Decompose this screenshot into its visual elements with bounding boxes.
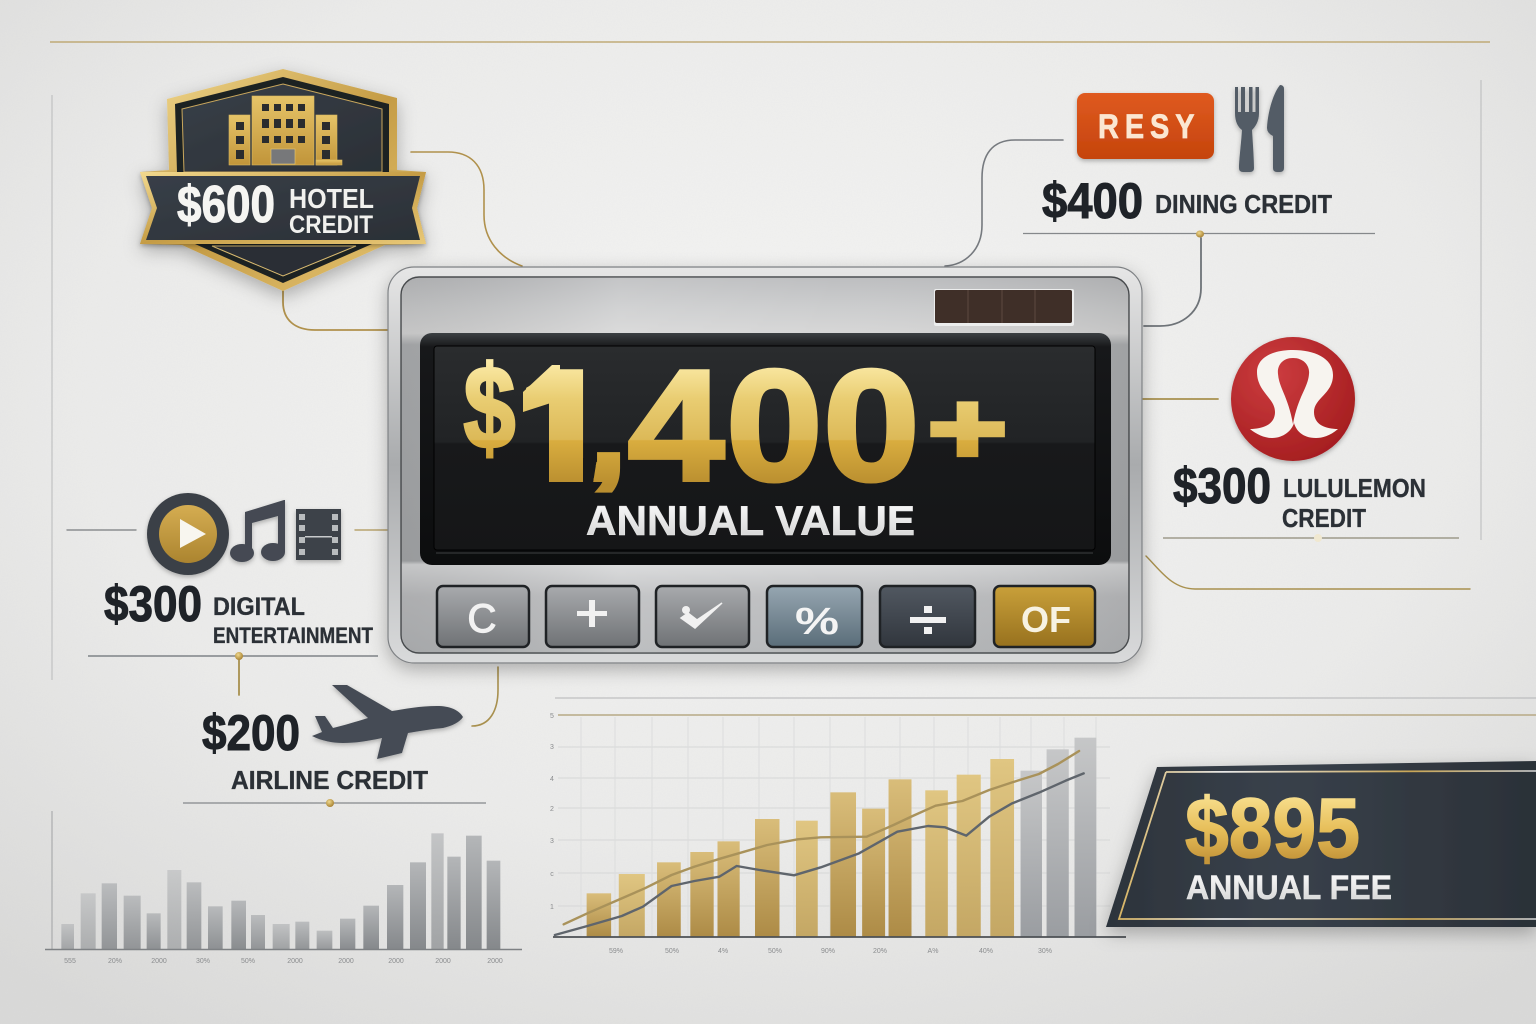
panel: airline credit [183, 685, 486, 807]
entertainment label: DIGITAL [213, 593, 305, 621]
x-axis labels: 2000 [151, 958, 167, 965]
y-axis labels [550, 713, 554, 911]
airline amount: $200 [202, 705, 300, 761]
panel: lululemon credit [1163, 337, 1459, 542]
logo: resy [1077, 93, 1214, 159]
display [420, 333, 1111, 565]
lululemon label [1282, 473, 1426, 533]
x-axis labels: 59% [609, 948, 623, 955]
icon: airplane [312, 685, 463, 759]
x-axis labels: 90% [821, 948, 835, 955]
x-axis labels: 50% [665, 948, 679, 955]
x-axis labels: A% [928, 948, 938, 955]
icon: film strip [296, 509, 341, 560]
x-axis labels: 20% [873, 948, 887, 955]
entertainment amount: $300 [104, 576, 202, 632]
keypad buttons [437, 586, 1095, 647]
x-axis labels: 30% [196, 958, 210, 965]
lululemon label: LULULEMON [1283, 473, 1426, 503]
hotel label: CREDIT [289, 211, 373, 239]
bar chart: historic value, left [45, 811, 522, 965]
button plus [546, 586, 639, 647]
shield [140, 69, 426, 291]
entertainment label: ENTERTAINMENT [213, 623, 373, 648]
x-axis labels: 30% [1038, 948, 1052, 955]
annual value figure [463, 359, 1005, 493]
button divide [880, 586, 975, 647]
icon: music note [230, 500, 285, 562]
x-axis labels: 2000 [435, 958, 451, 965]
divider with dot [88, 652, 378, 660]
lululemon label: CREDIT [1282, 503, 1366, 533]
panel: digital entertainment credit [88, 493, 378, 660]
x-axis labels: 4% [718, 948, 728, 955]
solar strip [934, 289, 1074, 326]
dining label: DINING CREDIT [1155, 189, 1332, 219]
x-axis labels: 50% [768, 948, 782, 955]
x-axis labels: 20% [108, 958, 122, 965]
annual value figure: , [590, 364, 627, 498]
annual value figure: 1 [516, 338, 613, 514]
bar chart: value vs fee, centre [550, 698, 1536, 955]
fee amount: $895 [1185, 781, 1360, 875]
hotel label [289, 183, 374, 239]
annual value label: ANNUAL VALUE [586, 497, 915, 544]
divider with dot [1163, 534, 1459, 542]
button OF: OF [1021, 599, 1071, 640]
panel: annual fee [1106, 761, 1536, 927]
icon: hotel building [229, 96, 342, 165]
airline label: AIRLINE CREDIT [231, 765, 428, 795]
badge: hotel credit [140, 69, 426, 291]
hotel label: HOTEL [289, 183, 374, 214]
x-axis labels: 2000 [287, 958, 303, 965]
fee plaque [1106, 761, 1536, 927]
x-axis labels: 2000 [388, 958, 404, 965]
divider with dot [183, 799, 486, 807]
chart bars [555, 738, 1096, 937]
button check [656, 586, 749, 647]
y-axis labels: 3 [550, 744, 554, 751]
divider with dot [1023, 230, 1375, 238]
x-axis labels: 50% [241, 958, 255, 965]
x-axis labels: 555 [64, 958, 76, 965]
y-axis labels: c [550, 871, 554, 878]
trend line: slate [555, 773, 1084, 935]
x-axis labels [609, 948, 1052, 955]
button OF [994, 586, 1095, 647]
annual value figure: 400 [628, 338, 920, 514]
button percent [767, 586, 862, 647]
calculator body [388, 267, 1142, 663]
logo: resy: RESY [1098, 107, 1200, 146]
connector lines [67, 140, 1470, 726]
y-axis labels: 3 [550, 838, 554, 845]
x-axis labels [64, 958, 503, 965]
annual value figure: + [928, 372, 1007, 484]
icon: fork and knife [1235, 85, 1284, 172]
logo: lululemon [1231, 337, 1355, 461]
fee label: ANNUAL FEE [1186, 869, 1392, 907]
chart grid [555, 698, 1536, 937]
y-axis labels: 1 [550, 904, 554, 911]
button C [437, 586, 529, 647]
button percent: % [795, 601, 839, 643]
trend line: gold [564, 751, 1079, 924]
y-axis labels: 2 [550, 806, 554, 813]
y-axis labels: 4 [550, 776, 554, 783]
hotel amount: $600 [177, 176, 275, 234]
calculator [388, 267, 1142, 663]
x-axis labels: 2000 [487, 958, 503, 965]
entertainment label [213, 593, 373, 648]
annual value figure: $ [464, 342, 516, 474]
ribbon [140, 172, 426, 244]
lululemon amount: $300 [1173, 458, 1271, 514]
x-axis labels: 2000 [338, 958, 354, 965]
icon: play button [147, 493, 229, 575]
panel: dining credit [1023, 85, 1375, 238]
y-axis labels: 5 [550, 713, 554, 720]
button C: C [468, 597, 496, 641]
dining amount: $400 [1042, 173, 1143, 229]
x-axis labels: 40% [979, 948, 993, 955]
